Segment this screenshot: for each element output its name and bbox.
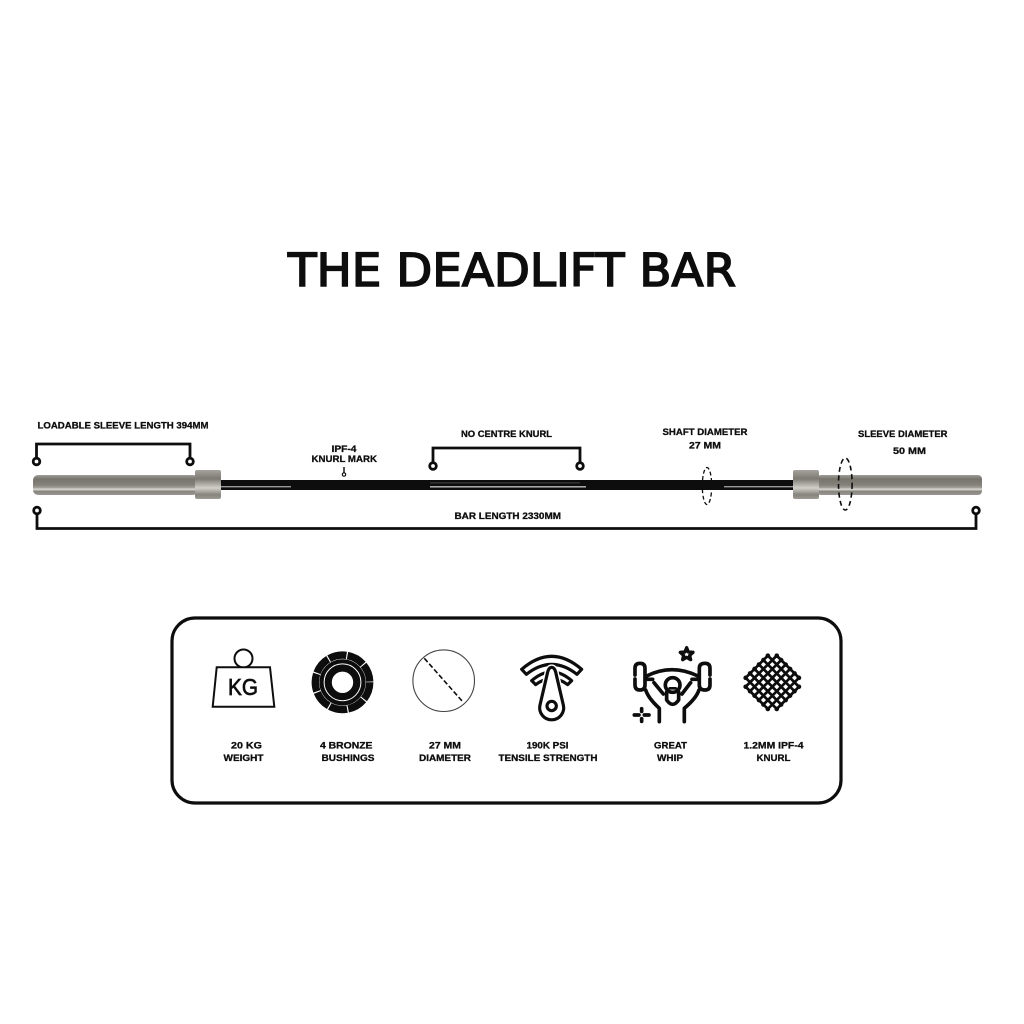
label: 20 kg weight bbox=[224, 740, 264, 764]
label: no centre knurl: NO CENTRE KNURL bbox=[461, 429, 552, 440]
label: 1.2mm ipf-4 knurl: 1.2MM IPF-4 bbox=[744, 740, 804, 752]
label: 190k psi tensile strength: TENSILE STRENGTH bbox=[498, 753, 598, 764]
panel: specifications bbox=[172, 618, 841, 803]
label: IPF-4 knurl mark: IPF-4 bbox=[332, 444, 357, 455]
icon: kg weight bbox=[213, 650, 274, 707]
icon: tensile gauge bbox=[522, 656, 582, 720]
label: 190k psi tensile strength: 190K PSI bbox=[526, 740, 568, 752]
bracket: bar length bbox=[34, 507, 979, 528]
label: 27 mm diameter: DIAMETER bbox=[419, 753, 471, 764]
label: shaft diameter: SHAFT DIAMETER bbox=[662, 427, 748, 438]
label: shaft diameter bbox=[662, 427, 748, 452]
icon: diameter circle bbox=[413, 650, 475, 712]
dashed ring: sleeve diameter bbox=[838, 458, 852, 510]
label: 4 bronze bushings: 4 BRONZE bbox=[320, 740, 372, 752]
label: IPF-4 knurl mark: KNURL MARK bbox=[312, 454, 377, 465]
label: 1.2mm ipf-4 knurl bbox=[744, 740, 804, 764]
label: sleeve diameter: 50 MM bbox=[893, 446, 926, 457]
label: 4 bronze bushings: BUSHINGS bbox=[322, 753, 374, 764]
dashed ring: shaft diameter bbox=[702, 468, 712, 504]
label: great whip: WHIP bbox=[657, 753, 684, 764]
label: 20 kg weight: WEIGHT bbox=[224, 753, 264, 764]
icon: lifter with whip bar bbox=[634, 648, 710, 722]
label: 1.2mm ipf-4 knurl: KNURL bbox=[756, 753, 791, 764]
label: loadable sleeve length: LOADABLE SLEEVE LENGTH 394MM bbox=[38, 420, 209, 432]
label: 190k psi tensile strength bbox=[498, 740, 598, 764]
label: 27 mm diameter: 27 MM bbox=[429, 740, 461, 752]
label: great whip: GREAT bbox=[654, 740, 687, 752]
barbell bbox=[33, 470, 982, 499]
label: sleeve diameter bbox=[858, 429, 948, 457]
icon: kg weight: KG bbox=[228, 674, 258, 700]
icon: knurl diamond bbox=[741, 651, 803, 713]
label: 20 kg weight: 20 KG bbox=[231, 740, 262, 752]
bracket: loadable sleeve length bbox=[33, 444, 193, 465]
label: great whip bbox=[654, 740, 687, 764]
label: bar length: BAR LENGTH 2330MM bbox=[454, 511, 561, 522]
label: sleeve diameter: SLEEVE DIAMETER bbox=[858, 429, 948, 440]
label: 4 bronze bushings bbox=[320, 740, 374, 764]
icon: bronze bushings bbox=[315, 655, 370, 710]
label: IPF-4 knurl mark bbox=[312, 444, 377, 476]
label: 27 mm diameter bbox=[419, 740, 471, 764]
bracket: no centre knurl bbox=[430, 448, 583, 469]
label: shaft diameter: 27 MM bbox=[689, 440, 721, 452]
title: THE DEADLIFT BAR bbox=[287, 244, 736, 297]
